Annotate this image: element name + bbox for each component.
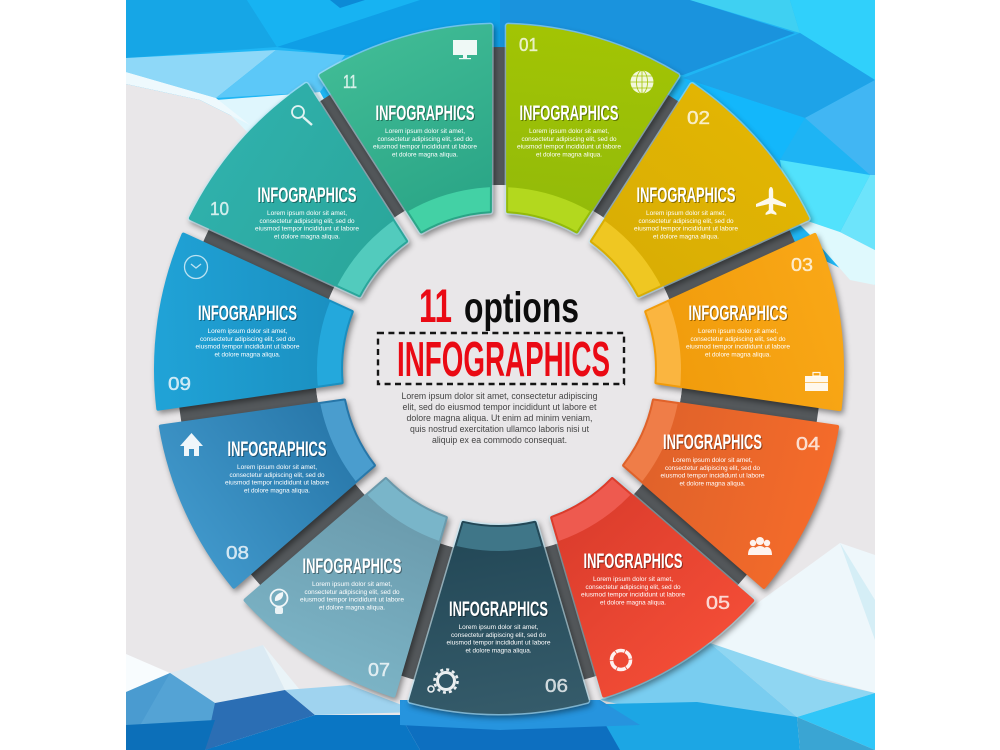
text 10: consectetur adipiscing elit, sed do [260,218,355,225]
icon: gears [428,670,458,692]
heading 07: INFOGRAPHICS [302,555,402,578]
shape 02 [588,82,816,304]
text 01: consectetur adipiscing elit, sed do [522,136,617,143]
center paragraph: aliquip ex ea commodo consequat. [432,435,567,446]
text 11 [373,128,477,158]
text 11: consectetur adipiscing elit, sed do [378,136,473,143]
number 03: 03 [791,255,813,275]
panel: segment 11 [318,22,499,240]
text 07: eiusmod tempor incididunt ut labore [300,596,404,604]
text 04: eiusmod tempor incididunt ut labore [660,472,765,480]
text 07 [300,581,404,612]
text 08: eiusmod tempor incididunt ut labore [225,480,329,486]
icon: briefcase [805,372,828,391]
shape 01 [503,22,685,240]
text 05 [581,576,685,606]
panel: segment 01 [503,22,685,240]
text 11: eiusmod tempor incididunt ut labore [373,144,477,150]
heading 05: INFOGRAPHICS [584,550,682,573]
shape 07 [243,477,453,704]
title: 11 options: options [464,284,579,332]
center paragraph [402,391,598,446]
text 10: eiusmod tempor incididunt ut labore [255,226,359,232]
text 03: et dolore magna aliqua. [705,352,771,358]
shape 11 [318,22,499,240]
number 09: 09 [168,374,191,394]
text 07: et dolore magna aliqua. [319,604,385,612]
text 03: eiusmod tempor incididunt ut labore [686,344,790,350]
icon: clock [184,256,208,278]
text 10: et dolore magna aliqua. [274,234,340,240]
shape 09 [152,232,359,417]
text 09 [196,328,300,358]
text 07: consectetur adipiscing elit, sed do [304,589,400,596]
number 06: 06 [545,676,568,696]
text 03 [686,328,790,358]
heading 10: INFOGRAPHICS [258,184,356,207]
number 05: 05 [706,593,730,613]
center paragraph: Lorem ipsum dolor sit amet, consectetur adipiscing [402,391,598,402]
center paragraph: quis nostrud exercitation ullamco laboris nisi ut [410,424,589,435]
title: INFOGRAPHICS: INFOGRAPHICS [397,333,610,387]
heading 06: INFOGRAPHICS [449,598,548,621]
text 08: Lorem ipsum dolor sit amet, [237,464,317,471]
text 09: eiusmod tempor incididunt ut labore [196,344,300,350]
text 09: consectetur adipiscing elit, sed do [200,336,295,343]
text 05: eiusmod tempor incididunt ut labore [581,592,685,598]
text 02: et dolore magna aliqua. [653,234,719,240]
text 07: Lorem ipsum dolor sit amet, [312,581,392,588]
icon: ring [612,650,630,670]
heading 04: INFOGRAPHICS [663,431,762,454]
icon: light bulb [270,590,288,614]
heading 09: INFOGRAPHICS [198,302,297,325]
text 03: Lorem ipsum dolor sit amet, [698,328,778,335]
text 02: consectetur adipiscing elit, sed do [638,218,734,225]
heading 02: INFOGRAPHICS [636,184,736,207]
panel: segment 03 [643,232,850,418]
panel: segment 10 [187,82,414,304]
number 08: 08 [226,543,249,563]
center paragraph: elit, sed do eiusmod tempor incididunt ut labore et [402,402,597,413]
title: 11 options [419,279,579,332]
panel: segment 04 [621,398,844,594]
text 02: Lorem ipsum dolor sit amet, [646,210,726,217]
text 06: et dolore magna aliqua. [466,648,532,654]
text 04: consectetur adipiscing elit, sed do [665,465,760,472]
panel: segment 02 [588,82,816,304]
text 02: eiusmod tempor incididunt ut labore [634,226,738,232]
icon: house [180,433,203,456]
panel: segment 07 [243,477,453,704]
icon: people [748,537,772,555]
background: low-poly sky and ground [126,0,875,750]
icon: monitor [453,40,477,59]
text 06 [446,624,551,654]
text 01 [517,128,621,158]
shape 03 [643,232,850,418]
text 04: Lorem ipsum dolor sit amet, [672,457,753,464]
text 08 [225,464,329,494]
heading 01: INFOGRAPHICS [520,102,618,125]
text 09: Lorem ipsum dolor sit amet, [208,328,288,335]
icon: globe [630,70,654,94]
text 05: et dolore magna aliqua. [600,600,666,606]
text 04: et dolore magna aliqua. [680,480,746,488]
text 04 [660,457,765,488]
dark connector ring visible between the segments [246,116,752,622]
text 05: Lorem ipsum dolor sit amet, [593,576,673,583]
text 08: et dolore magna aliqua. [244,488,310,494]
panel: segment 06 [406,519,595,722]
text 06: consectetur adipiscing elit, sed do [451,632,546,639]
text 11: Lorem ipsum dolor sit amet, [385,128,465,135]
text 11: et dolore magna aliqua. [392,152,458,158]
heading 03: INFOGRAPHICS [688,302,788,325]
number 07: 07 [368,660,390,680]
text 01: eiusmod tempor incididunt ut labore [517,144,621,150]
text 03: consectetur adipiscing elit, sed do [690,336,786,343]
panel: segment 05 [548,476,760,704]
text 06: eiusmod tempor incididunt ut labore [446,640,551,646]
shape 06 [406,519,595,722]
number 04: 04 [796,434,820,454]
shape 10 [187,82,414,304]
text 10 [255,210,359,240]
text 10: Lorem ipsum dolor sit amet, [267,210,347,217]
text 06: Lorem ipsum dolor sit amet, [458,624,539,631]
shape 04 [621,398,844,594]
center paragraph: dolore magna aliqua. Ut enim ad minim veniam, [406,413,592,424]
number 11: 11 [343,72,357,92]
shape 08 [158,398,381,594]
heading 08: INFOGRAPHICS [228,438,326,461]
text 05: consectetur adipiscing elit, sed do [586,584,681,591]
number 10: 10 [210,199,229,219]
panel: segment 08 [158,398,381,594]
shape 05 [548,476,760,704]
number 02: 02 [687,108,710,128]
central disc [315,185,683,553]
panel: segment 09 [152,232,359,417]
text 01: et dolore magna aliqua. [536,152,602,158]
icon: magnifier [292,106,312,125]
title: 11 options: 11 [419,279,452,332]
text 09: et dolore magna aliqua. [214,352,281,358]
icon: airplane [756,187,786,215]
text 08: consectetur adipiscing elit, sed do [230,472,325,479]
text 02 [634,210,738,240]
number 01: 01 [519,35,538,55]
text 01: Lorem ipsum dolor sit amet, [529,128,609,135]
dashed title box [378,333,624,384]
heading 11: INFOGRAPHICS [376,102,474,125]
